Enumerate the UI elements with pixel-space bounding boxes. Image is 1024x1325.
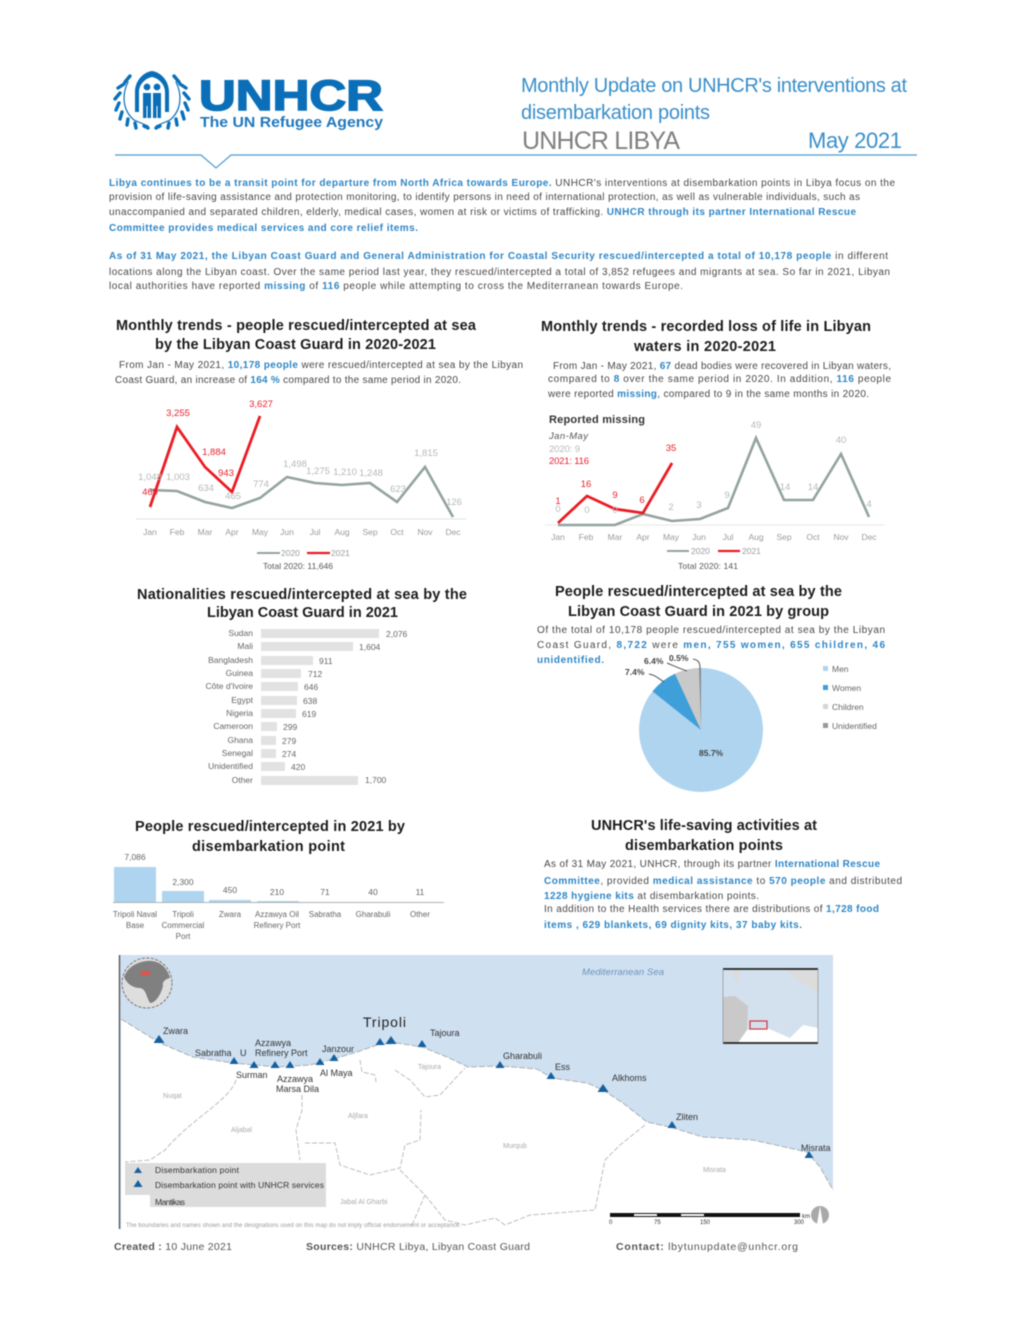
line chart: loss of life per month: Nov <box>833 532 849 542</box>
line chart: rescued per month: 126 <box>446 497 462 508</box>
bar chart: nationalities: Cameroon <box>213 721 253 731</box>
line chart: rescued per month: 1,884 <box>202 447 226 458</box>
heading: disembarkation point <box>192 839 345 855</box>
bar chart: nationalities: 299 <box>283 722 297 732</box>
map labels: cities: U <box>240 1048 246 1058</box>
description: Of the total of 10,178 people rescued/intercepted at sea by the Libyan <box>537 625 885 636</box>
bar chart: disembarkation points: Sabratha <box>309 910 342 919</box>
bar chart: disembarkation points: Azzawya Oil <box>255 910 299 919</box>
line chart: rescued per month: 774 <box>253 479 269 490</box>
bar chart: nationalities: 712 <box>308 669 322 679</box>
line chart: rescued per month <box>136 399 466 537</box>
line chart: loss of life per month: 6 <box>639 495 645 506</box>
map labels: districts: Aljabal <box>231 1127 252 1134</box>
line chart: rescued per month: Nov <box>417 527 433 537</box>
line chart: loss of life per month: Oct <box>806 532 820 542</box>
chart legend: 2020 <box>281 548 300 558</box>
heading <box>541 319 871 355</box>
line chart: rescued per month: Feb <box>170 527 185 537</box>
bar chart: disembarkation points: Base <box>126 921 145 930</box>
bar chart: disembarkation points: Refinery Port <box>254 921 301 930</box>
bar chart: disembarkation points: 2,300 <box>172 877 194 887</box>
reported missing note: Reported missing <box>549 414 645 426</box>
heading: Libyan Coast Guard in 2021 by group <box>568 604 829 620</box>
reported missing note <box>548 414 645 467</box>
panel: nationalities <box>137 587 467 785</box>
line chart: rescued per month: Aug <box>334 527 350 537</box>
map left border <box>118 955 120 1229</box>
bar chart: disembarkation points: Port <box>176 932 191 941</box>
map labels: cities: Tajoura <box>430 1028 460 1038</box>
map labels: cities: Tripoli <box>363 1014 406 1030</box>
bar chart: disembarkation points: 7,086 <box>124 852 146 862</box>
bar chart: nationalities: 638 <box>303 696 317 706</box>
map label: sea: Mediterranean Sea <box>582 967 664 978</box>
bar chart: nationalities: 2,076 <box>386 629 408 639</box>
heading: People rescued/intercepted in 2021 by <box>135 819 405 835</box>
chart legend: Total 2020: 141 <box>678 561 738 571</box>
line chart: rescued per month: 623 <box>390 484 406 495</box>
map labels: cities: Ess <box>555 1062 571 1072</box>
heading: waters in 2020-2021 <box>633 339 776 355</box>
description: Coast Guard, 8,722 were men, 755 women, 655 children, 46 <box>537 640 885 651</box>
description: In addition to the Health services there are distributions of 1,728 food <box>544 904 879 915</box>
line chart: rescued per month: 1,210 <box>333 467 357 478</box>
panel: monthly trends loss of life <box>541 319 891 571</box>
icon: locator globe <box>122 958 172 1008</box>
description <box>115 360 523 386</box>
bar chart: disembarkation points: 71 <box>320 887 330 897</box>
header: report title <box>521 75 907 155</box>
line chart: rescued per month: 1,248 <box>359 468 383 479</box>
chart legend: 2021 <box>331 548 350 558</box>
line chart: loss of life per month: 0 <box>555 504 561 515</box>
panel: monthly trends rescued <box>115 318 523 571</box>
bar chart: nationalities: Guinea <box>226 668 253 678</box>
pie chart: groups: 0.5% <box>669 653 689 663</box>
map labels: districts: Jabal Al Gharbi <box>340 1199 388 1206</box>
description: Committee, provided medical assistance to 570 people and distributed <box>544 876 902 887</box>
pie legend: Children <box>832 702 864 712</box>
reported missing note: 2021: 116 <box>549 456 589 467</box>
map labels: cities: Al Maya <box>320 1068 353 1078</box>
intro text block: local authorities have reported missing of 116 people while attempting to cross the Mediterranean towards Europe. <box>109 281 683 292</box>
bar chart: disembarkation points: Tripoli Naval <box>113 910 157 919</box>
heading: People rescued/intercepted at sea by the <box>555 584 842 600</box>
intro text block: As of 31 May 2021, the Libyan Coast Guard and General Administration for Coastal Security rescued/intercepted a total of 10,178 people in different <box>109 251 888 262</box>
scale bar: km <box>802 1214 810 1220</box>
intro text block: locations along the Libyan coast. Over the same period last year, they rescued/intercepted a total of 3,852 refugees and migrants at sea. So far in 2021, Libyan <box>109 267 890 278</box>
map labels: cities: Surman <box>236 1070 268 1080</box>
map labels: districts: Nuqat <box>163 1093 182 1100</box>
bar chart: nationalities: 1,700 <box>365 775 387 785</box>
footer: contact: Contact: lbytunupdate@unhcr.org <box>616 1241 798 1253</box>
reported missing note: 2020: 9 <box>549 444 580 455</box>
line chart: rescued per month: 1,003 <box>166 472 190 483</box>
map coastline <box>121 1019 833 1190</box>
line chart: loss of life per month: 0 <box>584 505 590 516</box>
heading: UNHCR's life-saving activities at <box>591 818 817 834</box>
pie legend <box>823 664 877 731</box>
line chart: rescued per month: Jan <box>143 527 157 537</box>
line chart: loss of life per month: 4 <box>866 499 872 510</box>
chart legend: 2020 <box>691 546 710 556</box>
map legend: Mantikas <box>155 1197 185 1207</box>
bar chart: nationalities: Unidentified <box>208 761 253 771</box>
line chart: rescued per month: Jun <box>280 527 294 537</box>
icon: UNHCR emblem <box>115 71 189 128</box>
heading <box>137 587 467 621</box>
bar chart: nationalities: Ghana <box>227 735 253 745</box>
line chart: loss of life per month: 40 <box>836 435 846 446</box>
map labels: cities: Azzawya <box>255 1038 291 1048</box>
line chart: loss of life per month: May <box>663 532 680 542</box>
heading: Nationalities rescued/intercepted at sea by the <box>137 587 467 603</box>
description: unidentified. <box>537 655 604 666</box>
line chart: loss of life per month: 16 <box>581 479 591 490</box>
map labels: cities: Zliten <box>676 1112 698 1122</box>
description: Coast Guard, an increase of 164 % compared to the same period in 2020. <box>115 375 461 386</box>
line chart: loss of life per month: 14 <box>808 482 818 493</box>
line chart: rescued per month: Mar <box>198 527 212 537</box>
description: From Jan - May 2021, 10,178 people were rescued/intercepted at sea by the Libyan <box>119 360 523 371</box>
bar chart: nationalities: 619 <box>302 709 316 719</box>
map labels: cities: Zwara <box>163 1026 188 1036</box>
line chart: rescued per month: 943 <box>218 468 234 479</box>
bar chart: nationalities: Senegal <box>222 748 253 758</box>
map sea <box>119 955 833 1229</box>
scale bar <box>609 1213 810 1226</box>
map labels: cities: Janzour <box>322 1044 354 1054</box>
bar chart: disembarkation points: 40 <box>368 887 378 897</box>
description: As of 31 May 2021, UNHCR, through its partner International Rescue <box>544 859 880 870</box>
description: were reported missing, compared to 9 in the same months in 2020. <box>547 389 869 400</box>
heading: disembarkation points <box>625 838 783 854</box>
line chart: loss of life per month: Mar <box>608 532 622 542</box>
line chart: loss of life per month: Apr <box>636 532 650 542</box>
line chart: rescued per month: 3,255 <box>166 408 190 419</box>
line chart: loss of life per month: 9 <box>612 490 618 501</box>
bar chart: disembarkation points: Other <box>410 910 430 919</box>
district boundaries <box>125 1060 645 1225</box>
map labels: cities: Sabratha <box>195 1048 232 1058</box>
description: compared to 8 over the same period in 2020. In addition, 116 people <box>548 374 891 385</box>
chart legend: Total 2020: 11,646 <box>263 561 333 571</box>
line chart: loss of life per month: 35 <box>666 443 676 454</box>
map labels: districts: Murqub <box>503 1143 527 1150</box>
header: report title: disembarkation points <box>521 102 710 124</box>
header: report title: UNHCR LIBYA <box>522 127 680 155</box>
scale bar: 0 <box>609 1220 613 1226</box>
bar chart: nationalities <box>206 628 408 785</box>
pie legend: Women <box>832 683 861 693</box>
panel: life-saving activities <box>544 818 902 931</box>
intro text block: unaccompanied and separated children, elderly, medical cases, women at risk or victims of trafficking. UNHCR through its partner International Rescue <box>109 207 856 218</box>
line chart: rescued per month: 1,275 <box>306 466 330 477</box>
footer: sources: Sources: UNHCR Libya, Libyan Coast Guard <box>306 1241 530 1253</box>
line chart: rescued per month: May <box>252 527 269 537</box>
bar chart: nationalities: Egypt <box>231 695 254 705</box>
heading: Monthly trends - people rescued/intercepted at sea <box>116 318 477 334</box>
line chart: loss of life per month: 14 <box>780 482 790 493</box>
line chart: loss of life per month: Jan <box>551 532 565 542</box>
description <box>544 859 902 931</box>
bar chart: nationalities: Bangladesh <box>208 655 253 665</box>
header: UNHCR logo <box>115 71 383 131</box>
line chart: rescued per month: Oct <box>390 527 404 537</box>
scale bar: 75 <box>654 1220 661 1226</box>
chart legend: 2021 <box>742 546 761 556</box>
line chart: loss of life per month: Jul <box>723 532 734 542</box>
heading <box>591 818 817 854</box>
map labels: districts: Tajoura <box>418 1064 441 1071</box>
map disclaimer: The boundaries and names shown and the designations used on this map do not imply official endorsement or acceptance. <box>126 1223 461 1229</box>
bar chart: disembarkation points: Tripoli <box>172 910 194 919</box>
panel: by disembarkation point <box>113 819 444 941</box>
scale bar: 300 <box>794 1220 805 1226</box>
pie legend: Men <box>832 664 849 674</box>
line chart: loss of life per month: 2 <box>668 502 674 513</box>
heading: by the Libyan Coast Guard in 2020-2021 <box>155 337 436 353</box>
map labels: cities: Alkhoms <box>612 1073 647 1083</box>
bar chart: nationalities: 420 <box>291 762 305 772</box>
line chart: loss of life per month: Dec <box>861 532 877 542</box>
heading: Libyan Coast Guard in 2021 <box>207 605 398 621</box>
map land <box>121 1019 833 1230</box>
line chart: rescued per month: 469 <box>142 487 158 498</box>
bar chart: nationalities: Sudan <box>228 628 253 638</box>
heading: Monthly trends - recorded loss of life in Libyan <box>541 319 871 335</box>
map legend <box>125 1163 326 1207</box>
line chart: rescued per month: Jul <box>310 527 321 537</box>
line chart: loss of life per month: Jun <box>692 532 706 542</box>
heading <box>555 584 842 620</box>
heading <box>116 318 477 353</box>
bar chart: disembarkation points: 11 <box>416 887 425 897</box>
heading <box>135 819 405 855</box>
logo wordmark: UNHCR <box>199 72 383 120</box>
intro text block: provision of life-saving assistance and protection monitoring, to identify persons in need of international protection, as well as vulnerable individuals, such as <box>109 192 860 203</box>
panel: people by group <box>537 584 885 792</box>
bar chart: nationalities: Côte d'Ivoire <box>206 681 253 691</box>
header divider with notch <box>115 155 917 168</box>
pie chart: groups <box>625 653 763 792</box>
bar chart: nationalities: 911 <box>319 656 333 666</box>
pie chart: groups: 6.4% <box>644 656 664 666</box>
chart legend <box>257 548 350 571</box>
description: items , 629 blankets, 69 dignity kits, 37 baby kits. <box>544 920 802 931</box>
description <box>547 361 891 400</box>
chart legend <box>667 546 761 571</box>
logo tagline: The UN Refugee Agency <box>200 115 383 131</box>
map labels: districts <box>163 1064 726 1206</box>
map labels: cities: Refinery Port <box>255 1048 308 1058</box>
pie chart: groups: 7.4% <box>625 667 645 677</box>
map markers: disembarkation points <box>154 1035 814 1158</box>
reported missing note: Jan-May <box>548 431 589 442</box>
line chart: loss of life per month: 1 <box>555 496 561 507</box>
bar chart: disembarkation points: Commercial <box>162 921 205 930</box>
line chart: rescued per month: 465 <box>225 491 241 502</box>
line chart: rescued per month: 1,815 <box>414 448 438 459</box>
footer <box>114 1241 798 1253</box>
map labels: cities: Gharabuli <box>503 1051 542 1061</box>
map legend: Disembarkation point <box>155 1165 240 1175</box>
line chart: rescued per month: 3,627 <box>249 399 273 410</box>
map labels: cities: Marsa Dila <box>276 1084 319 1094</box>
bar chart: nationalities: Mali <box>237 641 253 651</box>
map panel <box>119 955 833 1230</box>
line chart: rescued per month: 1,048 <box>138 472 162 483</box>
footer: created date: Created : 10 June 2021 <box>114 1241 232 1253</box>
bar chart: nationalities: Other <box>232 775 253 785</box>
description <box>537 625 885 666</box>
line chart: loss of life per month: Aug <box>748 532 764 542</box>
map labels: cities <box>163 1014 831 1153</box>
line chart: loss of life per month: Feb <box>579 532 594 542</box>
header: report title: Monthly Update on UNHCR's interventions at <box>521 75 907 97</box>
line chart: loss of life per month: 3 <box>696 500 702 511</box>
line chart: loss of life per month: 49 <box>751 420 761 431</box>
line chart: loss of life per month: 0 <box>612 505 618 516</box>
header: report title: May 2021 <box>808 128 902 153</box>
map labels: cities: Azzawya <box>277 1074 313 1084</box>
line chart: rescued per month: Dec <box>445 527 461 537</box>
inset map <box>723 969 818 1043</box>
line chart: rescued per month: 1,498 <box>283 459 307 470</box>
description: From Jan - May 2021, 67 dead bodies were recovered in Libyan waters, <box>553 361 891 372</box>
bar chart: disembarkation points: Zwara <box>219 910 242 919</box>
bar chart: nationalities: 1,604 <box>359 642 381 652</box>
pie legend: Unidentified <box>832 721 877 731</box>
map labels: districts: Aljfara <box>348 1113 368 1120</box>
bar chart: disembarkation points: 210 <box>270 887 284 897</box>
pie chart: groups: 85.7% <box>699 748 724 758</box>
bar chart: nationalities: 279 <box>282 736 296 746</box>
intro text block: Libya continues to be a transit point for departure from North Africa towards Europe. UNHCR's interventions at disembarkation points in Libya focus on the <box>109 178 895 189</box>
line chart: loss of life per month <box>545 420 884 542</box>
intro text block: Committee provides medical services and core relief items. <box>109 223 418 234</box>
scale bar: 150 <box>700 1220 711 1226</box>
bar chart: disembarkation points: 450 <box>223 885 237 895</box>
map labels: districts: Misrata <box>703 1167 726 1174</box>
icon: north arrow <box>811 1206 829 1224</box>
line chart: rescued per month: Apr <box>225 527 239 537</box>
bar chart: disembarkation points <box>113 852 444 941</box>
bar chart: nationalities: 274 <box>282 749 296 759</box>
intro text block <box>109 178 895 292</box>
line chart: rescued per month: Sep <box>362 527 378 537</box>
bar chart: nationalities: Nigeria <box>226 708 253 718</box>
line chart: rescued per month: 634 <box>198 483 214 494</box>
line chart: loss of life per month: Sep <box>776 532 792 542</box>
description: 1228 hygiene kits at disembarkation points. <box>544 891 759 902</box>
bar chart: nationalities: 646 <box>304 682 318 692</box>
map legend: Disembarkation point with UNHCR services <box>155 1180 324 1190</box>
map labels: cities: Misrata <box>801 1143 831 1153</box>
bar chart: disembarkation points: Gharabuli <box>356 910 391 919</box>
line chart: loss of life per month: 9 <box>724 490 730 501</box>
